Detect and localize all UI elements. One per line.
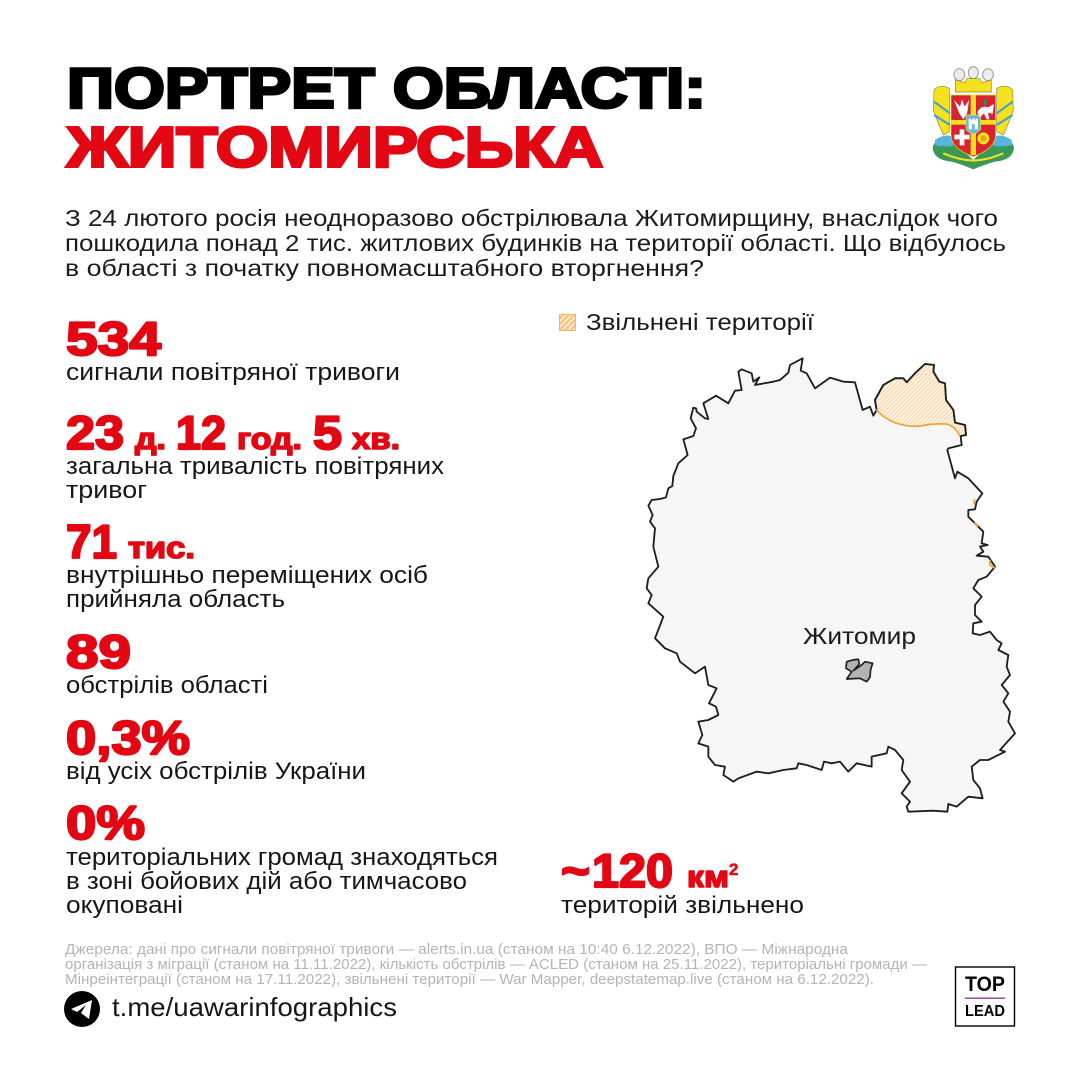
city label: Житомир: [803, 623, 916, 649]
stat: alert duration: хв.: [352, 421, 400, 456]
legend: liberated territories: Звільнені території: [586, 309, 815, 335]
small liberated patches: [974, 500, 994, 567]
logo: Top Lead: LEAD: [965, 1003, 1005, 1020]
stat: liberated area: [561, 845, 804, 919]
stat: displaced persons: тис.: [128, 530, 195, 565]
sources: [65, 941, 927, 988]
stat: displaced persons: [66, 516, 428, 613]
sources: організація з міграції (станом на 11.11.2022), кількість обстрілів — ACLED (станом на 25.11.2022), територіальні громади —: [65, 956, 927, 973]
stat: alert duration: загальна тривалість повітряних: [66, 453, 444, 480]
stat: alert duration: год.: [237, 421, 302, 456]
oblast outline: [647, 358, 1015, 812]
logo: Top Lead: TOP: [965, 973, 1005, 996]
stat: share of shellings: від усіх обстрілів України: [66, 758, 366, 785]
stat: share of shellings: 0,3%: [66, 712, 190, 765]
stat: communities: окуповані: [66, 892, 183, 919]
stat: displaced persons: 71: [66, 516, 117, 569]
stat: alert duration: д.: [135, 421, 166, 456]
intro text: [65, 205, 1006, 281]
map: Zhytomyr oblast: [647, 358, 1015, 812]
stat: air raid signals: [66, 313, 400, 386]
stat: shellings: обстрілів області: [66, 672, 268, 699]
icon: telegram: [64, 991, 100, 1027]
sources: Джерела: дані про сигнали повітряної тривоги — alerts.in.ua (станом на 10:40 6.12.2022), ВПО — Міжнародна: [65, 941, 849, 958]
stat: liberated area: територій звільнено: [561, 892, 804, 919]
logo: Top Lead: [956, 967, 1014, 1026]
stat: liberated area: км: [687, 859, 729, 894]
eagle: [954, 99, 969, 119]
stat: displaced persons: прийняла область: [66, 586, 285, 613]
liberated territory hatch: [875, 364, 966, 435]
stat: alert duration: 12: [176, 407, 226, 460]
stat: alert duration: [66, 407, 444, 504]
intro text: пошкодила понад 2 тис. житлових будинків на території області. Що відбулось: [65, 230, 1006, 256]
icon: coat of arms: [933, 67, 1014, 169]
title: ПОРТРЕТ ОБЛАСТІ:: [67, 56, 706, 120]
liberated territory outline: [875, 364, 966, 436]
stat: alert duration: 5: [313, 407, 342, 460]
sun: [977, 132, 989, 144]
stat: liberated area: ~: [561, 845, 590, 898]
sources: Мінреінтеграції (станом на 17.11.2022), звільнені території — War Mapper, deepstatemap.live (станом на 6.12.2022).: [65, 971, 874, 988]
knight: [977, 104, 994, 119]
white cross: [954, 129, 970, 145]
stat: displaced persons: внутрішньо переміщених осіб: [66, 562, 428, 589]
telegram link: t.me/uawarinfographics: [112, 992, 397, 1022]
title: [66, 56, 706, 180]
stat: shellings: 89: [66, 626, 131, 679]
intro text: в області з початку повномасштабного вторгнення?: [65, 255, 704, 281]
stat: alert duration: тривог: [66, 477, 147, 504]
city: Zhytomyr: [846, 659, 873, 682]
intro text: З 24 лютого росія неодноразово обстрілювала Житомирщину, внаслідок чого: [65, 205, 998, 231]
shield: [951, 95, 996, 157]
stat: liberated area: 120: [592, 845, 673, 898]
stat: share of shellings: [66, 712, 366, 785]
stat: communities: 0%: [66, 797, 145, 850]
stat: shellings: [66, 626, 268, 699]
stat: alert duration: 23: [66, 407, 124, 460]
stat: air raid signals: сигнали повітряної тривоги: [66, 359, 400, 386]
stat: communities: в зоні бойових дій або тимчасово: [66, 868, 467, 895]
stat: liberated area: 2: [729, 860, 738, 879]
stat: communities: територіальних громад знаходяться: [66, 844, 498, 871]
stat: communities: [66, 797, 498, 919]
stat: air raid signals: 534: [66, 313, 162, 366]
white domes of crown: [954, 67, 993, 81]
title: ЖИТОМИРСЬКА: [66, 116, 603, 180]
liberated border line: [877, 410, 959, 435]
wreath: [933, 137, 1014, 169]
